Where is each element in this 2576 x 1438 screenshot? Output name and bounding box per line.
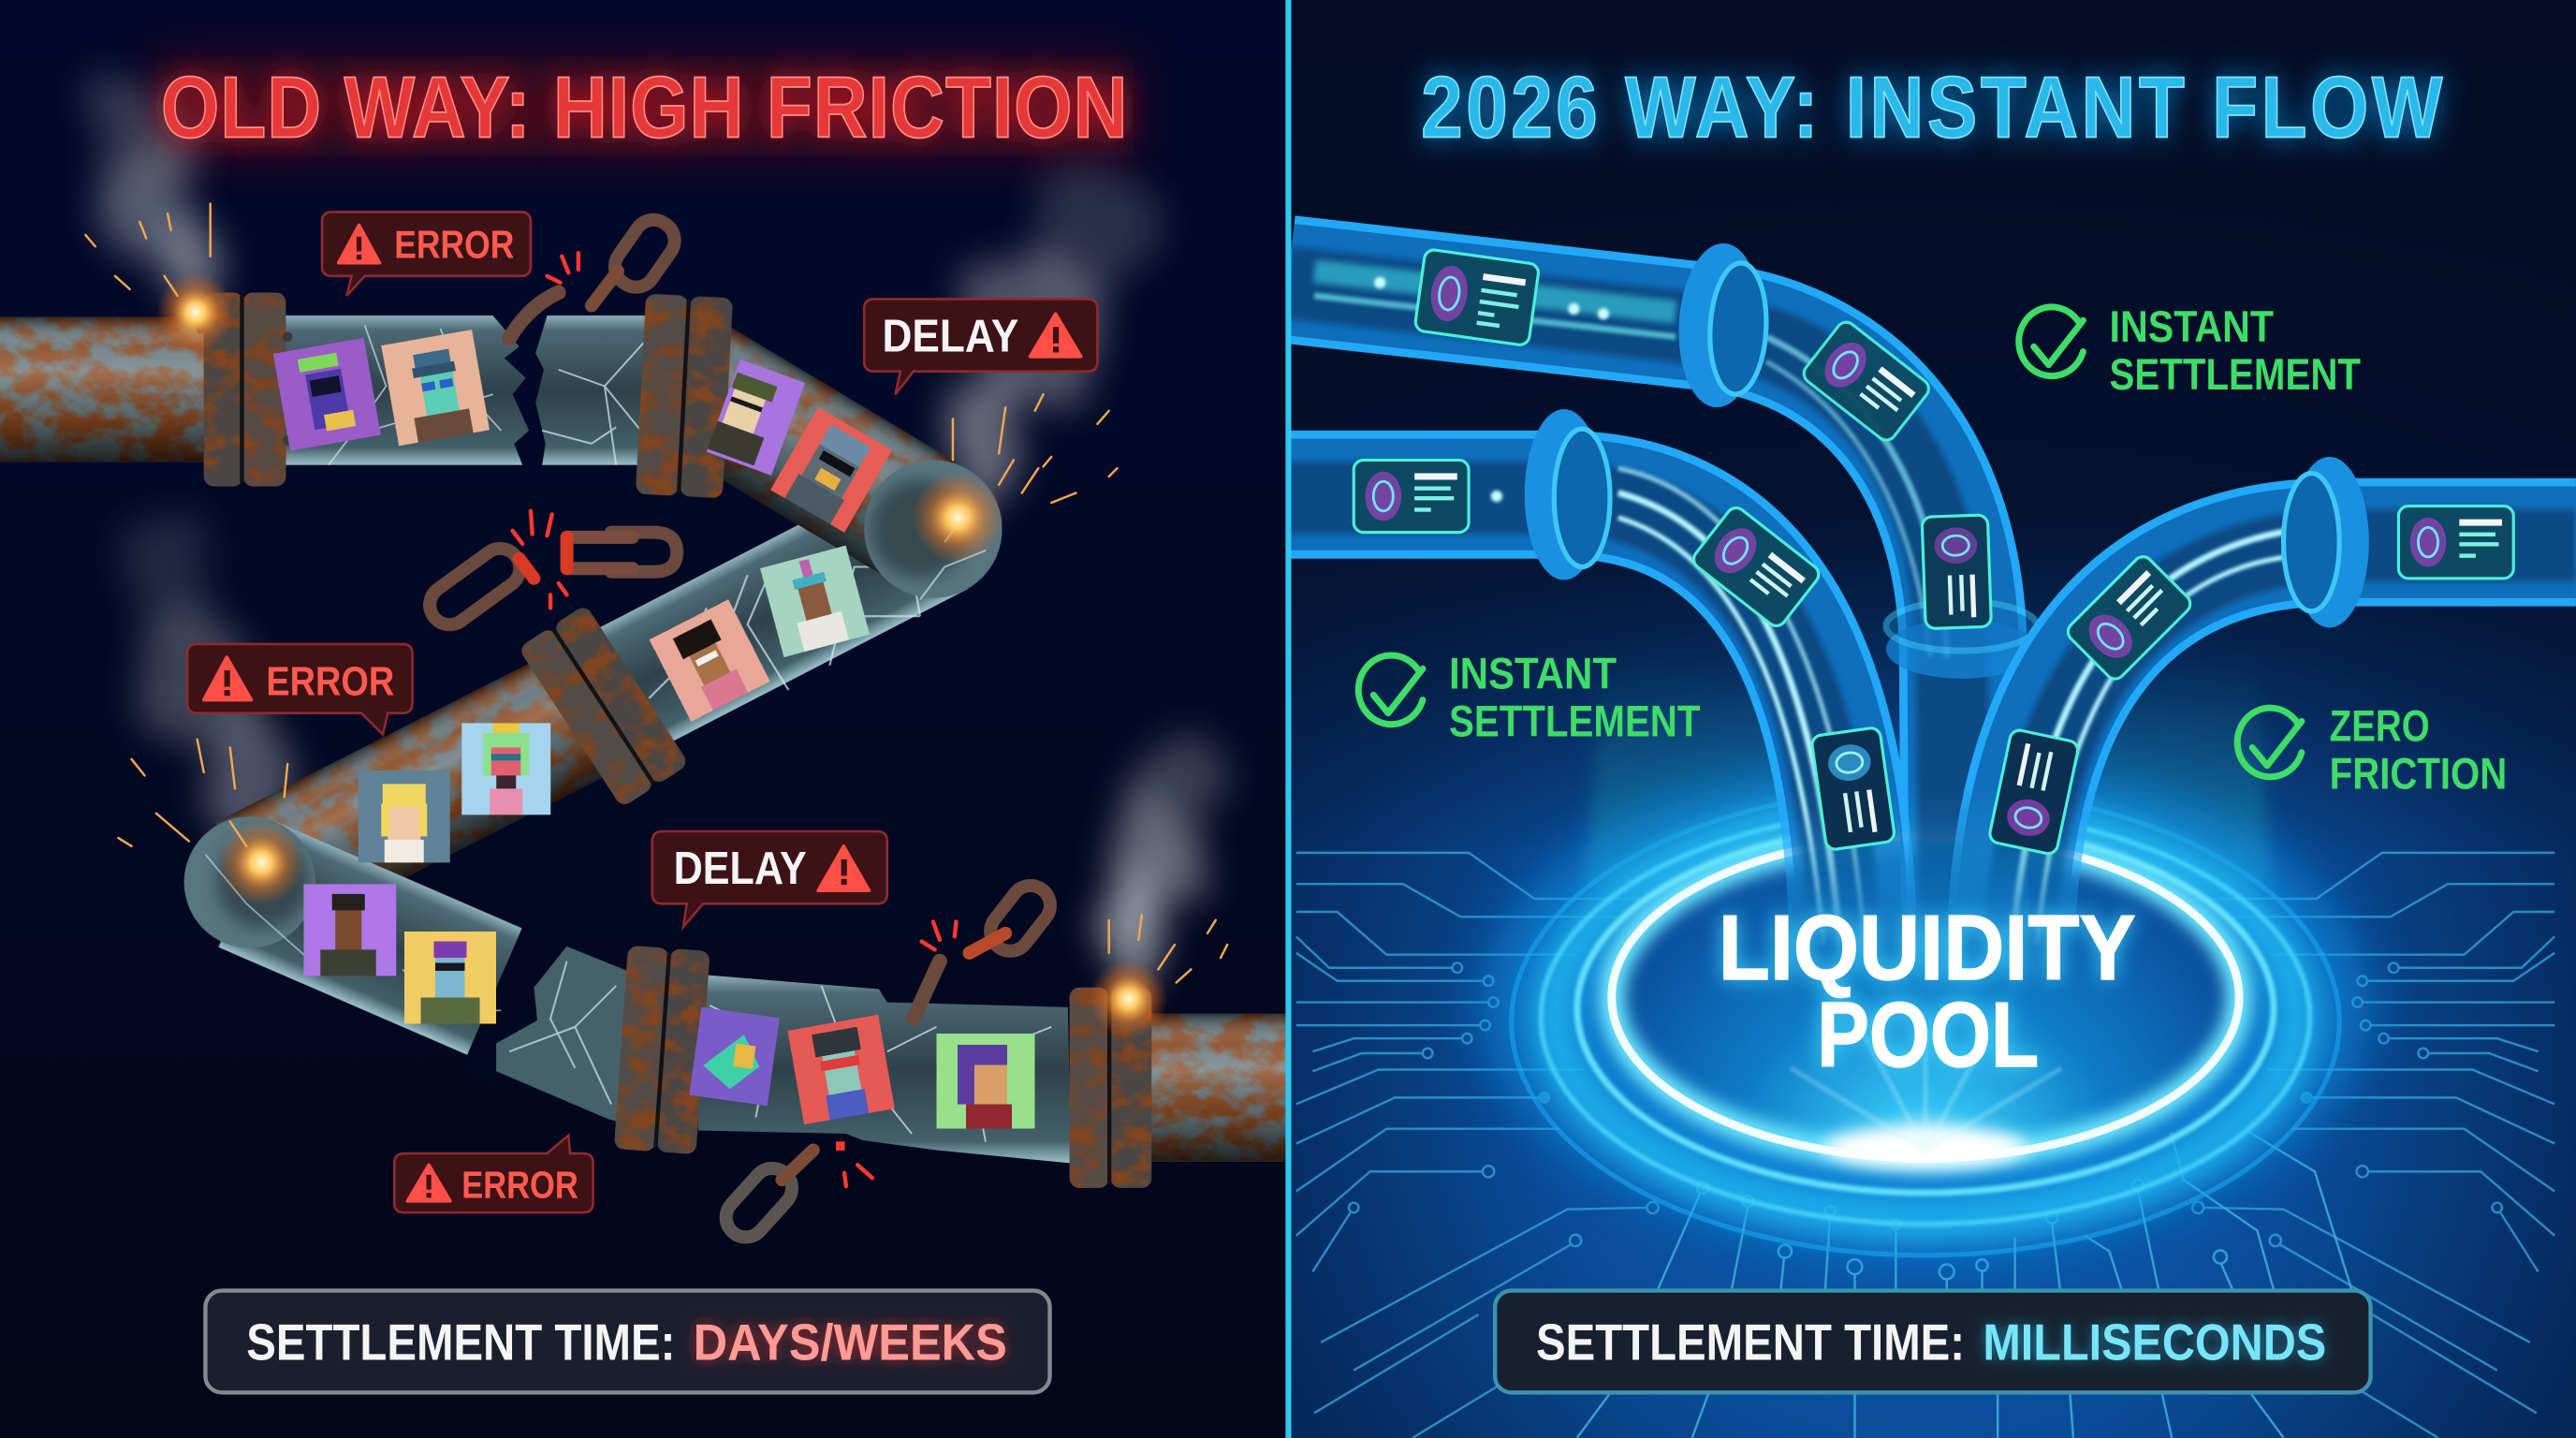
data card: left pipe straight [1354,460,1469,533]
label: zero friction: ZERO [2330,702,2430,752]
label: instant settlement: SETTLEMENT [1449,697,1701,746]
data card: left pipe lower [1811,726,1895,850]
value: milliseconds: MILLISECONDS [1983,1313,2326,1371]
title glow backdrop [156,57,1134,156]
flange: elbow top [636,294,733,498]
title: 2026 way: 2026 WAY: INSTANT FLOW [1421,59,2442,156]
label: delay: DELAY [674,844,807,894]
pipe: top left rusty section [0,317,222,462]
icon: check circle [2237,708,2302,777]
callout: error left [187,644,413,734]
panel: old way background [0,0,1288,1438]
status bar: settlement time milliseconds [1495,1291,2371,1392]
nft card: yellow zombie [404,932,496,1023]
icon: check circle [2019,307,2083,376]
callout: error top [322,212,531,296]
data card: centre vertical [1922,515,1991,629]
value: days/weeks: DAYS/WEEKS [694,1313,1007,1371]
chain: middle [422,511,677,633]
pipe: bottom right rusty section [1142,1014,1290,1162]
label: pool: POOL [1817,983,2039,1086]
flange: centre pipe collar [1886,601,2037,679]
pipe: left glass pipe [1288,468,1865,945]
callout: error bottom [394,1136,593,1212]
flange: top pipe [1675,242,1769,409]
pipe: upper elbow rusty section [723,328,1002,600]
data card: top pipe left [1414,249,1540,346]
pipe: right glass pipe [2011,529,2576,945]
data card: right pipe lower [1988,728,2080,856]
pipe: upper elbow glass [600,524,968,741]
label: settlement time: SETTLEMENT TIME: [246,1313,675,1371]
sparks [85,204,1227,1038]
chain: top [509,213,682,339]
callout: delay right [864,299,1097,394]
flange: middle diagonal [518,604,689,808]
label: error: ERROR [266,658,394,704]
icon: warning triangle [818,846,869,890]
benefit: instant settlement top [2019,302,2361,400]
nft card: blonde girl [359,770,450,862]
data card: right pipe straight [2398,506,2513,579]
nft card: sky crown [461,723,550,814]
nft card: green purple-hair [936,1034,1035,1129]
icon: warning triangle [1030,314,1081,357]
light beams above pool [1586,657,2271,888]
icon: check circle [1358,655,1423,725]
nft card: pink afro [650,599,770,722]
pipe: broken end before flange [496,946,627,1122]
data card: left pipe bend [1690,504,1822,630]
nft card: abstract mosaic [689,1007,780,1106]
flange: lower [614,946,710,1154]
smoke plumes [84,70,1225,992]
pipe: centre glass pipe [1288,271,1965,920]
status bar: settlement time days/weeks [205,1291,1050,1392]
label: settlement time: SETTLEMENT TIME: [1536,1313,1965,1371]
nft card: purple man [304,884,396,976]
panel: 2026 way [1288,59,2576,1438]
nft card: red zombie [787,1015,895,1124]
pool label [1719,896,2136,1086]
chain: bottom [718,1143,872,1245]
title: old way: OLD WAY: HIGH FRICTION [161,59,1127,156]
nft card: purple glasses man [707,360,805,476]
chain: lower right [914,878,1058,1019]
label: zero friction: FRICTION [2330,749,2507,799]
label: instant settlement: INSTANT [1449,649,1617,698]
icon: warning triangle [407,1165,450,1201]
flange: right pipe [2284,457,2369,627]
nft card: purple duck [273,338,381,451]
flange: left pipe [1525,409,1610,580]
speed lights in pipes [1374,277,1609,502]
icon: warning triangle [204,657,252,700]
data card: right pipe bend [2064,552,2194,682]
label: liquidity: LIQUIDITY [1719,896,2136,999]
pipe: lower left rusty diagonal [215,664,603,878]
label: error: ERROR [461,1163,578,1206]
nft card: mint feather [760,546,870,657]
callout: delay centre [652,831,887,927]
benefit: instant settlement left [1358,649,1701,746]
nft card: red ape [770,407,892,533]
label: instant settlement: INSTANT [2110,302,2274,352]
panel: 2026 way background [1288,0,2576,1438]
icon: warning triangle [339,225,379,263]
benefit: zero friction [2237,702,2507,799]
pipe: lower elbow glass [183,816,522,1055]
data card: top pipe bend [1800,318,1933,444]
liquidity pool [1482,759,2369,1255]
flange: top left [196,292,292,486]
circuit traces [1296,853,2554,1438]
panel: old way [0,57,1290,1392]
pipe: lower cracked glass section [698,975,1071,1164]
flange: lower right [1070,988,1151,1188]
pipe: cracked glass section upper right [535,315,657,465]
label: delay: DELAY [883,312,1018,362]
label: instant settlement: SETTLEMENT [2110,350,2361,400]
pipe: cracked glass section upper left [279,315,529,465]
nft card: peach punk [381,330,490,446]
label: error: ERROR [394,223,514,267]
divider [1285,0,1292,1438]
